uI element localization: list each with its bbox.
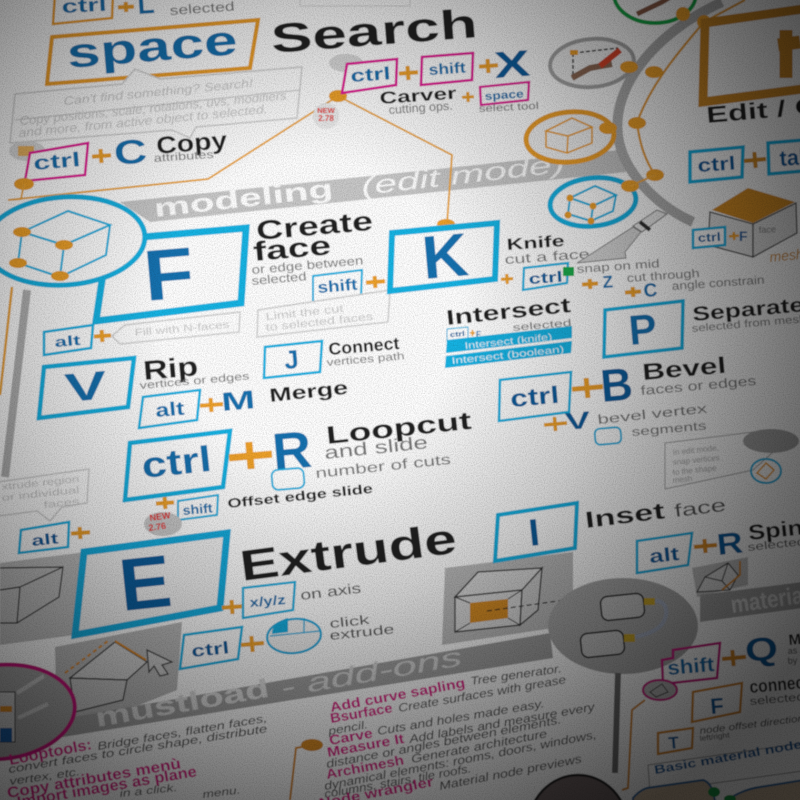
- panel: intersect: Intersect (knife): [464, 332, 553, 352]
- heading: knife: [504, 233, 590, 267]
- key: P separate: selected from mesh: [691, 313, 800, 335]
- shortcut: T node offset: [658, 713, 800, 754]
- shortcut: alt M merge: Merge: [268, 378, 349, 407]
- shortcut: T node offset: T: [668, 733, 680, 753]
- shortcut: shift limit the cut: to selected faces: [265, 311, 374, 334]
- callout: extrude region: xtrude region: [1, 474, 80, 493]
- panel: add-ons list: Create surfaces with grease: [397, 674, 567, 715]
- shortcut: alt M merge: M: [220, 384, 256, 417]
- left gray and orange rails: [0, 287, 27, 477]
- panel: add-ons list: Measure It: [326, 731, 406, 760]
- panel: add-ons list: distance or angles between elements.: [325, 714, 562, 771]
- shortcut: ctrl C copy attributes: ctrl: [33, 149, 81, 175]
- heading: create face: Create: [255, 206, 374, 246]
- shortcut: alt extrude: alt: [31, 530, 59, 550]
- icon: magenta circle with object: [0, 657, 80, 767]
- icon: circle with connected nodes: [548, 578, 698, 674]
- shortcut: ctrl R loopcut: Loopcut: [325, 407, 474, 450]
- shortcut: ctrl B bevel: V: [564, 407, 591, 436]
- icon: paint brush gray circle: [548, 35, 663, 91]
- connector lines to carver and knife: [8, 90, 455, 229]
- panel: add-ons list: Material node previews: [438, 753, 583, 793]
- shortcut: ctrl click extrude: [180, 612, 395, 669]
- shortcut: shift Q: as: [787, 645, 798, 656]
- key: J connect: Connect: [328, 334, 400, 359]
- key: P separate: [604, 294, 800, 357]
- shortcut: ctrl R loopcut: [125, 407, 474, 520]
- shortcut: extrude on axis: x/y/z: [249, 592, 287, 610]
- shortcut: alt R spin: [637, 516, 800, 573]
- panel: intersect: [445, 294, 572, 368]
- callout: extrude region: or individual: [1, 485, 80, 504]
- shortcut: ctrl knife modifiers: angle constrain: [671, 275, 765, 293]
- icon: orange cube circle: [524, 108, 646, 166]
- icon: cube with orange top face and ctrl F: [693, 188, 800, 265]
- panel: basic material node: Basic material node: [653, 737, 800, 777]
- key: J connect: J: [283, 344, 300, 375]
- shortcut: ctrl B bevel: ctrl: [509, 382, 560, 413]
- shortcut: shift Q: shift: [667, 654, 716, 680]
- callout: fill with n-faces: [112, 312, 240, 344]
- icon: paint brush circle green (top): [614, 0, 711, 29]
- shortcut: ctrl knife modifiers: snap on mid: [576, 258, 660, 276]
- callout: extrude region: faces: [43, 496, 80, 511]
- connector: add-ons dot: [290, 739, 323, 800]
- shortcut: alt R spin: selected: [747, 536, 800, 554]
- shortcut: ctrl shift X carver: Carver: [379, 84, 458, 108]
- key: E extrude: [75, 533, 227, 635]
- panel: looptools add-on text: [6, 713, 268, 800]
- shortcut: alt M merge: alt: [155, 398, 186, 422]
- key: I inset: face: [673, 495, 727, 521]
- key: space: space: [65, 16, 239, 77]
- shortcut: ctrl click extrude: extrude: [329, 621, 395, 643]
- shortcut: ctrl R loopcut: and slide: [323, 432, 429, 463]
- key: V rip: [39, 351, 250, 418]
- section band: materials: [700, 580, 800, 622]
- shortcut: F connect: selected: [749, 691, 800, 708]
- key: V rip: V: [63, 363, 109, 411]
- panel: add-ons list: Add curve sapling: [329, 675, 466, 715]
- heading: create face: [251, 206, 374, 288]
- callout: snap vertices to mesh: In edit mode,: [672, 443, 719, 457]
- badge: new 2.76: [144, 510, 182, 536]
- panel: add-ons list: Add labels and measure every: [407, 701, 597, 746]
- key: I inset: [495, 495, 727, 561]
- shortcut: T node offset: node offset direction: [699, 713, 800, 737]
- shortcut: ctrl knife modifiers: Z: [602, 272, 614, 292]
- shortcut: ctrl R loopcut: Offset edge slide: [227, 481, 374, 511]
- shortcut: ctrl shift X carver: space: [484, 88, 524, 103]
- shortcut: extrude on axis: on axis: [299, 580, 362, 603]
- heading: knife: cut a face: [504, 246, 590, 267]
- icon: node wrangler pink circle: [622, 680, 677, 790]
- shortcut: ctrl R loopcut: number of cuts: [315, 451, 452, 481]
- panel: add-ons list: Carve: [328, 725, 374, 748]
- shortcut: ctrl click extrude: click: [329, 612, 371, 631]
- key: K knife: K: [419, 220, 471, 292]
- key: I inset: Inset: [583, 497, 667, 533]
- shortcut: ctrl tab: ctrl: [697, 153, 736, 177]
- badge: new 2.76: NEW: [149, 510, 172, 523]
- panel: intersect: Intersect (boolean): [451, 344, 565, 367]
- connector lines top right: [637, 0, 745, 175]
- panel: looptools add-on text: Bridge faces, flatten faces,: [97, 713, 268, 753]
- shortcut: shift limit the cut: shift: [317, 276, 359, 297]
- gray panel: inset illustration: [442, 552, 573, 645]
- shortcut: alt R spin: R: [715, 526, 745, 562]
- shortcut: T node offset: left/right: [699, 730, 731, 743]
- shortcut: ctrl shift X carver: ctrl: [350, 63, 391, 86]
- icon: cube with orange top face and ctrl F: F: [739, 228, 748, 244]
- key: V rip: vertices or edges: [139, 370, 250, 392]
- shortcut: shift limit the cut: [257, 270, 390, 337]
- panel: intersect: selected: [512, 318, 572, 334]
- key: P separate: Separate: [692, 294, 800, 326]
- key: F create face: F: [140, 233, 197, 317]
- callout: snap vertices to mesh: to the shape: [672, 463, 718, 477]
- badge: new 2.76: 2.76: [148, 521, 167, 533]
- gray panel: extrude house illustration: [55, 622, 182, 738]
- icon: spin illustration: [697, 561, 740, 592]
- shortcut: alt extrude: [19, 522, 90, 553]
- section band: mustload add-ons: mustload: [93, 673, 271, 733]
- shortcut: alt M merge: [139, 378, 349, 428]
- shortcut: ctrl shift X carver: select tool: [479, 101, 539, 115]
- panel: add-ons list: [318, 663, 598, 800]
- key: J connect: [264, 334, 405, 378]
- shortcut: ctrl L fragment: [53, 0, 410, 24]
- shortcut: alt fill: [44, 325, 111, 355]
- shortcut: ctrl B bevel: faces or edges: [640, 373, 757, 398]
- icon: snap circle: [743, 429, 799, 483]
- shortcut: ctrl knife modifiers: C: [643, 280, 658, 302]
- shortcut: ctrl shift X carver: [329, 43, 539, 117]
- panel: add-ons list: columns, stairs, tile roofs.: [323, 763, 472, 800]
- panel: add-ons list: pencil.: [326, 719, 369, 738]
- shortcut: ctrl R loopcut: shift: [182, 500, 214, 518]
- icon: blue cube circle: [548, 169, 664, 230]
- section band: mustload add-ons: - add-ons: [278, 641, 464, 703]
- shortcut: shift Q: Q: [743, 629, 779, 669]
- callout: extrude region: [0, 469, 89, 521]
- shortcut: F connect: F: [709, 693, 725, 719]
- shortcut: ctrl C copy attributes: Copy: [155, 127, 229, 160]
- shortcut: ctrl R loopcut: ctrl: [140, 438, 213, 486]
- panel: looptools add-on text: Looptools:: [8, 736, 93, 769]
- panel: intersect: ctrl: [450, 331, 465, 339]
- key: K knife: [390, 220, 497, 292]
- shortcut: alt R spin: Spin: [747, 516, 800, 545]
- shortcut: shift limit the cut: Limit the cut: [265, 303, 344, 323]
- key: V rip: Rip: [142, 351, 199, 386]
- badge: new 2.78: 2.78: [318, 114, 334, 123]
- section band: modeling (edit mode): (edit mode): [360, 150, 566, 201]
- section band: modeling (edit mode): modeling: [153, 175, 335, 223]
- callout: snap vertices to mesh: mesh: [672, 474, 693, 485]
- shortcut: alt R spin: alt: [648, 544, 681, 568]
- panel: intersect: F: [476, 330, 481, 339]
- shortcut: F connect: [692, 672, 800, 722]
- icon: create face circle with cube: [0, 192, 148, 290]
- callout: snap vertices to mesh: [665, 432, 772, 489]
- shortcut: ctrl B bevel: Bevel: [641, 352, 727, 385]
- large gray arc: [617, 2, 722, 222]
- shortcut: ctrl shift X carver: cutting ops.: [388, 99, 453, 117]
- callout: snap vertices to mesh: snap vertices: [672, 453, 720, 467]
- gray panel: spin illustration: [692, 557, 748, 597]
- callout: search and copy attributes: and more, from active object to selected.: [18, 102, 268, 140]
- shortcut: ctrl shift X carver: shift: [428, 59, 466, 79]
- shortcut: ctrl L fragment: selected: [169, 0, 235, 18]
- gray panel: extrude cube illustration: [0, 552, 85, 645]
- panel: intersect: Intersect: [445, 294, 572, 330]
- panel: looptools add-on text: convert faces to circle shape, distribute: [8, 723, 268, 776]
- section band: modeling (edit mode): [120, 150, 626, 223]
- icon: extruded cube left: [0, 567, 63, 623]
- shortcut: shift Q: by: [787, 655, 798, 666]
- shortcut: ctrl B bevel: [499, 352, 757, 445]
- heading: knife: Knife: [506, 233, 565, 254]
- key: T large (edit / object mode): [703, 8, 800, 102]
- shortcut: ctrl knife modifiers: [501, 258, 765, 302]
- callout: fill with n-faces: Fill with N-faces: [134, 320, 230, 339]
- callout: search and copy attributes: [10, 67, 302, 143]
- icon: craft knife: [577, 210, 667, 263]
- gray vertical rail: [615, 673, 618, 773]
- section band: mustload add-ons: [57, 633, 553, 738]
- key: I inset: I: [527, 512, 542, 555]
- heading: create face: or edge between: [251, 253, 364, 277]
- panel: add-ons list: Generate architecture: [410, 728, 548, 766]
- shortcut: extrude on axis: [222, 580, 362, 618]
- panel: add-ons list: Archimesh: [325, 752, 405, 782]
- badge: new 2.78: [313, 103, 339, 129]
- shortcut: ctrl B bevel: bevel vertex: [597, 400, 708, 427]
- shortcut: alt fill: alt: [54, 332, 82, 350]
- key: space: [47, 16, 258, 84]
- shortcut: shift Q: [662, 629, 800, 684]
- panel: add-ons list: Cuts and holes made easy.: [377, 698, 545, 738]
- key: J connect: vertices path: [326, 350, 405, 369]
- panel: basic material node: [633, 737, 800, 800]
- panel: add-ons list: dynamical elements: rooms, doors, windows,: [323, 729, 598, 793]
- icon: cube with orange top face and ctrl F: ctrl: [697, 230, 721, 245]
- shortcut: ctrl B bevel: B: [598, 357, 635, 412]
- heading: create face: selected: [251, 269, 307, 288]
- shortcut: ctrl tab: [690, 139, 800, 182]
- shortcut: ctrl knife modifiers: cut through: [626, 268, 700, 285]
- shortcut: ctrl C copy attributes: attributes: [153, 149, 215, 165]
- icon: dark bottom circle: [528, 775, 628, 800]
- key: F create face: [96, 228, 246, 321]
- shortcut: ctrl shift X carver: X: [493, 43, 532, 86]
- panel: add-ons list: Bsurface: [329, 700, 394, 726]
- callout: search and copy attributes: Copy positions, scale, rotations, uvs, modifiers: [19, 88, 287, 128]
- shortcut: ctrl B bevel: segments: [631, 419, 707, 439]
- panel: add-ons list: Tree generator.: [470, 663, 563, 688]
- icon: cube with orange top face and ctrl F: face: [759, 224, 776, 235]
- panel: looptools add-on text: in a click.: [119, 782, 178, 800]
- icon: house shaped extrude with cursor: [65, 641, 172, 712]
- key: P separate: P: [627, 305, 659, 354]
- callout: search and copy attributes: Can't find something? Search!: [63, 78, 254, 108]
- heading: search: Search: [269, 0, 479, 62]
- panel: looptools add-on text: vertex, etc.: [9, 766, 81, 788]
- heading: create face: face: [252, 230, 332, 267]
- shortcut: ctrl knife modifiers: ctrl: [528, 269, 563, 288]
- icon: inset cube with orange face: [455, 568, 565, 632]
- badge: new 2.78: NEW: [317, 106, 336, 115]
- shortcut: ctrl C copy attributes: [9, 127, 229, 190]
- heading: extrude: Extrude: [237, 515, 459, 591]
- shortcut: ctrl R loopcut: R: [270, 421, 314, 482]
- shortcut: ctrl C copy attributes: C: [112, 132, 149, 173]
- shortcut: ctrl click extrude: ctrl: [190, 638, 230, 661]
- key: E extrude: E: [115, 539, 175, 627]
